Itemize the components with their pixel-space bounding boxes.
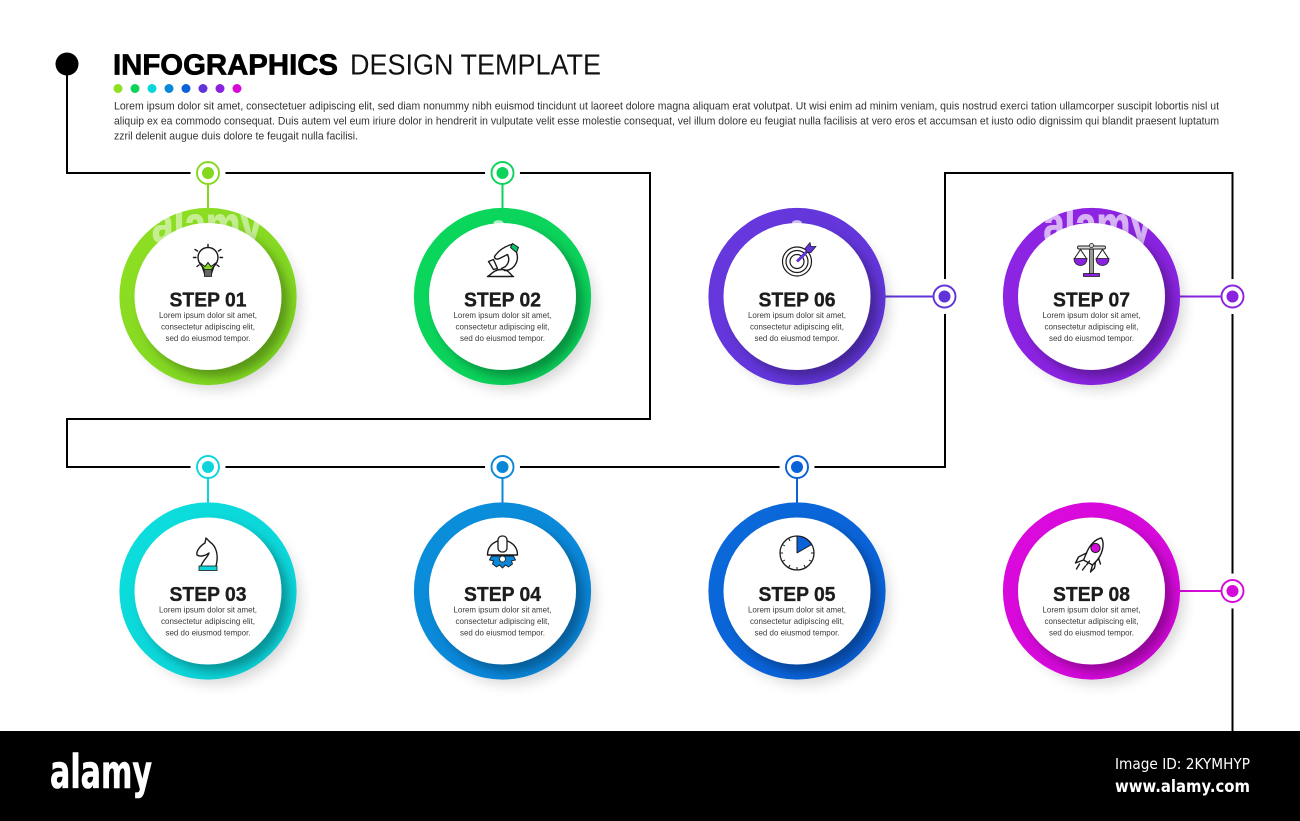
step text <box>1042 604 1140 638</box>
title: DESIGN TEMPLATE <box>350 50 601 82</box>
step text: Lorem ipsum dolor sit amet, <box>748 310 846 320</box>
step heading: STEP 03 <box>170 583 246 606</box>
panel: step 05 <box>708 502 889 684</box>
node: step 08 <box>1178 574 1250 608</box>
icon: scales <box>1074 244 1109 276</box>
step text <box>748 310 846 343</box>
node: step 04 <box>485 450 520 505</box>
step text <box>454 310 552 343</box>
step heading: STEP 04 <box>464 583 542 606</box>
footer image id: www.alamy.com <box>1115 777 1250 797</box>
title: INFOGRAPHICS <box>113 50 338 82</box>
footer logo: alamy <box>50 745 152 799</box>
icon: light bulb <box>194 244 222 276</box>
step heading: STEP 08 <box>1053 583 1130 606</box>
node: step 06 <box>884 279 962 314</box>
step text: Lorem ipsum dolor sit amet, <box>748 604 846 614</box>
step text: Lorem ipsum dolor sit amet, <box>1042 604 1140 614</box>
panel: step 03 <box>119 502 300 684</box>
panel: step 07 <box>1003 196 1184 390</box>
node: step 01 <box>190 156 226 210</box>
step text <box>1042 310 1140 343</box>
step text: sed do eiusmod tempor. <box>754 628 840 638</box>
panel: step 02 <box>414 208 594 390</box>
panel: step 04 <box>414 502 594 684</box>
step text: Lorem ipsum dolor sit amet, <box>159 310 257 320</box>
step heading: STEP 06 <box>758 288 836 312</box>
step text: Lorem ipsum dolor sit amet, <box>454 604 552 614</box>
node: step 02 <box>485 156 520 210</box>
footer bar <box>0 731 1300 821</box>
intro paragraph: aliquip ex ea commodo consequat. Duis autem vel eum iriure dolor in hendrerit in vulputate velit esse molestie consequat, vel illum dolore eu feugiat nulla facilisis at vero eros et accumsan et iusto odio dignissim qui blandit praesent luptatum <box>114 116 1219 128</box>
step text: sed do eiusmod tempor. <box>460 628 545 638</box>
step text <box>748 604 846 638</box>
step text: Lorem ipsum dolor sit amet, <box>1042 310 1140 320</box>
icon: microscope <box>488 244 518 276</box>
title <box>113 50 601 82</box>
step text: Lorem ipsum dolor sit amet, <box>454 310 552 320</box>
panel: step 08 <box>1003 502 1184 684</box>
step text: sed do eiusmod tempor. <box>754 333 840 343</box>
step heading: STEP 02 <box>464 288 541 312</box>
intro paragraph: Lorem ipsum dolor sit amet, consectetuer adipiscing elit, sed diam nonummy nibh euismod tincidunt ut laoreet dolore magna aliquam erat volutpat. Ut wisi enim ad minim veniam, quis nostrud exerci tation ullamcorper suscipit lobortis nisl ut <box>114 100 1219 112</box>
step text: consectetur adipiscing elit, <box>1044 322 1138 332</box>
icon: rocket <box>1076 538 1103 572</box>
step text: consectetur adipiscing elit, <box>161 616 255 626</box>
step text: consectetur adipiscing elit, <box>750 616 844 626</box>
step text <box>159 604 257 638</box>
step text: sed do eiusmod tempor. <box>166 628 250 638</box>
step heading: STEP 07 <box>1053 288 1130 312</box>
step heading: STEP 05 <box>758 583 836 606</box>
step heading: STEP 01 <box>170 288 246 312</box>
node: step 05 <box>780 450 814 505</box>
panel: step 07: alamy <box>1044 196 1152 252</box>
node: step 07 <box>1178 279 1250 314</box>
icon: target and dart <box>782 242 816 276</box>
step text <box>454 604 552 638</box>
panel: step 01: alamy <box>152 196 262 252</box>
step text: Lorem ipsum dolor sit amet, <box>159 604 257 614</box>
step text: consectetur adipiscing elit, <box>1044 616 1138 626</box>
step text <box>159 310 257 343</box>
footer image id <box>1115 755 1250 797</box>
panel: step 01 <box>119 196 300 390</box>
step text: consectetur adipiscing elit, <box>161 322 255 332</box>
colour dots row <box>114 84 242 93</box>
step text: sed do eiusmod tempor. <box>460 333 545 343</box>
intro paragraph: zzril delenit augue duis dolore te feugait nulla facilisi. <box>114 130 358 142</box>
icon: helmet and gear <box>488 536 518 568</box>
step text: sed do eiusmod tempor. <box>166 333 250 343</box>
step text: sed do eiusmod tempor. <box>1049 333 1134 343</box>
node: step 03 <box>190 450 226 505</box>
step text: consectetur adipiscing elit, <box>750 322 844 332</box>
step text: consectetur adipiscing elit, <box>456 616 550 626</box>
intro paragraph <box>114 100 1219 142</box>
connector line with start dot <box>56 52 1232 731</box>
icon: timer <box>780 536 814 570</box>
footer image id: Image ID: 2KYMHYP <box>1115 755 1250 773</box>
icon: chess knight <box>197 538 217 570</box>
step text: consectetur adipiscing elit, <box>456 322 550 332</box>
panel: step 06 <box>708 208 889 390</box>
step text: sed do eiusmod tempor. <box>1049 628 1134 638</box>
